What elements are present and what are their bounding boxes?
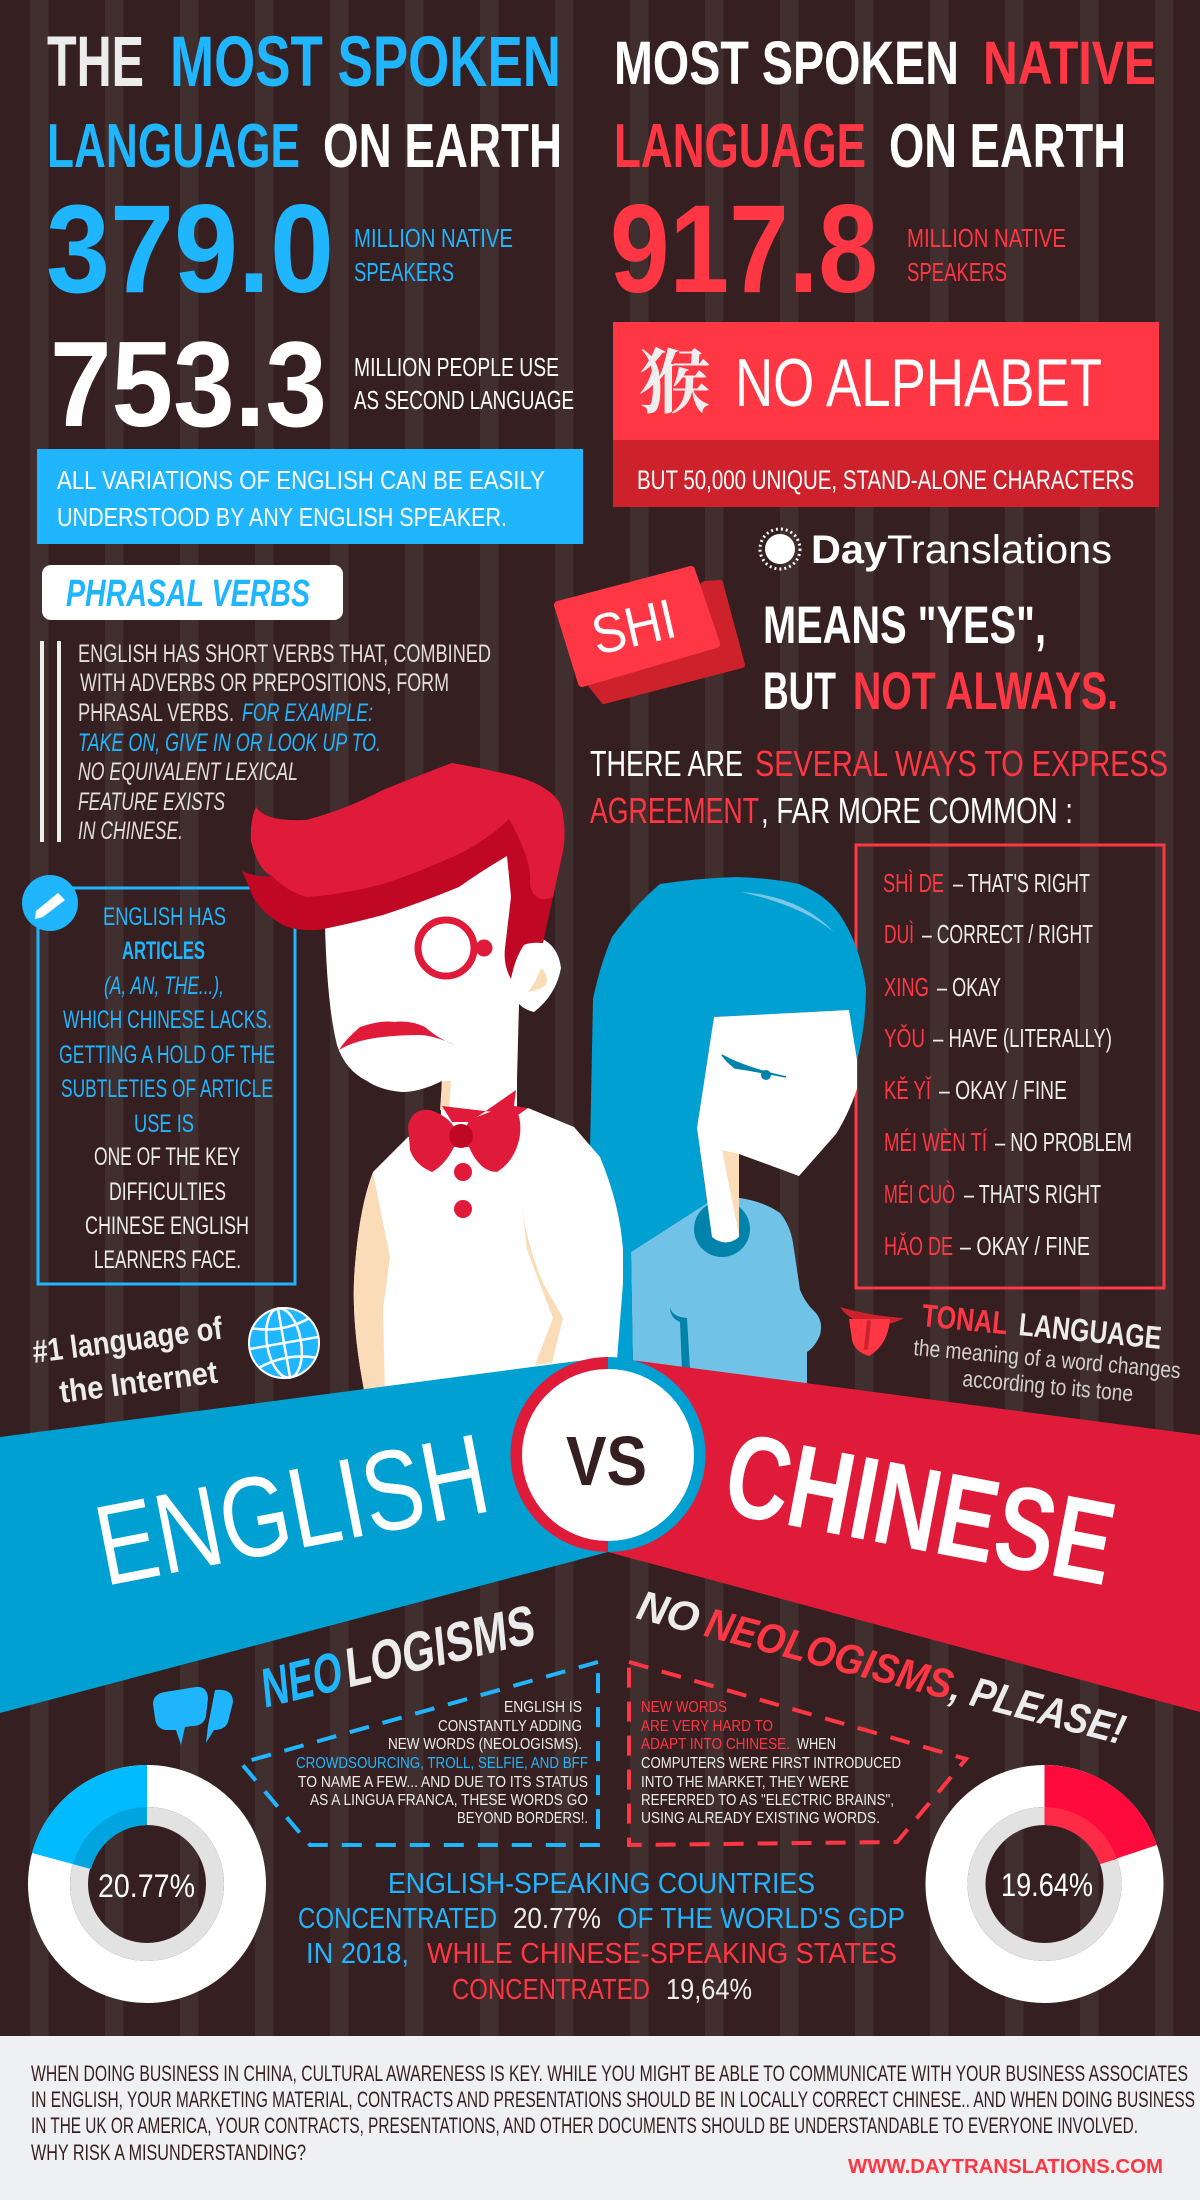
logo: Day Translations: Translations xyxy=(887,528,1112,572)
text block: phrasal verbs explanation: NO EQUIVALENT LEXICAL xyxy=(78,758,298,786)
callout: number one language of the internet: #1 language of xyxy=(30,1310,225,1370)
panel: ways to say yes: – NO PROBLEM xyxy=(995,1127,1132,1157)
panel: ways to say yes: MÉI CUÒ xyxy=(884,1179,955,1209)
chart: English GDP donut: 20.77% xyxy=(98,1868,195,1904)
badge: VS xyxy=(510,1357,706,1552)
heading: no neologisms, please xyxy=(633,1581,1130,1753)
panel: ways to say yes: – THAT'S RIGHT xyxy=(953,868,1090,898)
text block: phrasal verbs explanation: FEATURE EXISTS xyxy=(78,788,225,816)
text block: GDP comparison: WHILE CHINESE-SPEAKING STATES xyxy=(427,1938,897,1970)
panel: ways to say yes: – HAVE (LITERALLY) xyxy=(933,1023,1112,1053)
label: shi tag xyxy=(558,570,742,701)
heading: most spoken native language: LANGUAGE xyxy=(614,112,866,181)
illustration: man xyxy=(242,763,623,1395)
panel: articles: WHICH CHINESE LACKS. xyxy=(63,1006,272,1034)
badge: VS: VS xyxy=(566,1422,647,1500)
stat: 917.8 million native speakers: MILLION NATIVE xyxy=(907,223,1066,253)
panel: no neologisms explanation: USING ALREADY EXISTING WORDS. xyxy=(641,1810,880,1827)
stat: 753.3 million second language users: MILLION PEOPLE USE xyxy=(354,352,559,382)
panel: neologisms explanation: AS A LINGUA FRANCA, THESE WORDS GO xyxy=(310,1792,588,1809)
panel: ways to say yes: – CORRECT / RIGHT xyxy=(922,919,1093,949)
panel: articles xyxy=(22,875,295,1284)
stat: 917.8 million native speakers xyxy=(610,180,1066,319)
panel: no neologisms explanation: COMPUTERS WERE FIRST INTRODUCED xyxy=(641,1755,901,1772)
panel: no alphabet: NO ALPHABET xyxy=(735,345,1102,421)
text block: GDP comparison: CONCENTRATED xyxy=(298,1903,497,1935)
panel: neologisms explanation: BEYOND BORDERS!. xyxy=(457,1810,588,1827)
panel: no neologisms explanation: ADAPT INTO CHINESE. xyxy=(641,1736,790,1753)
icon: speech bubbles xyxy=(153,1687,233,1745)
panel: articles: DIFFICULTIES xyxy=(109,1178,226,1206)
stat: 753.3 million second language users: AS SECOND LANGUAGE xyxy=(354,385,574,415)
panel: no neologisms explanation: ARE VERY HARD TO xyxy=(641,1718,773,1735)
callout: variations of English xyxy=(37,449,583,544)
heading: most spoken language: MOST SPOKEN xyxy=(170,23,561,102)
text block: phrasal verbs explanation: TAKE ON, GIVE IN OR LOOK UP TO. xyxy=(78,729,381,757)
panel: ways to say yes: MÉI WÈN TÍ xyxy=(884,1127,988,1157)
chart: Chinese GDP donut xyxy=(946,1765,1157,1982)
heading: means yes, but not always: MEANS "YES", xyxy=(763,596,1046,655)
stat: 379.0 million native speakers: 379.0 xyxy=(46,180,334,319)
panel: ways to say yes: – OKAY / FINE xyxy=(939,1075,1067,1105)
heading: no neologisms, please: NO xyxy=(633,1581,705,1642)
text block: several ways to express agreement: , FAR MORE COMMON : xyxy=(761,790,1073,831)
footer panel xyxy=(0,2036,1200,2200)
text block: tonal language: according to its tone xyxy=(962,1365,1134,1406)
text block: tonal language: LANGUAGE xyxy=(1017,1306,1163,1356)
panel: articles: ENGLISH HAS xyxy=(103,903,226,931)
text block: phrasal verbs explanation: WITH ADVERBS OR PREPOSITIONS, FORM xyxy=(80,669,449,697)
text block: GDP comparison xyxy=(298,1868,905,2006)
text block: phrasal verbs explanation xyxy=(40,640,491,845)
text block: several ways to express agreement: THERE ARE xyxy=(590,743,743,784)
label: phrasal verbs xyxy=(42,565,343,620)
panel: no neologisms explanation: REFERRED TO AS "ELECTRIC BRAINS", xyxy=(641,1792,894,1809)
text block: tonal language: TONAL xyxy=(920,1297,1009,1341)
text block: phrasal verbs explanation: PHRASAL VERBS. xyxy=(78,699,234,727)
heading: most spoken native language: NATIVE xyxy=(983,29,1156,97)
panel: articles: USE IS xyxy=(134,1110,194,1138)
text block: tonal language xyxy=(913,1297,1182,1406)
panel: no neologisms explanation xyxy=(629,1662,966,1845)
panel: articles: GETTING A HOLD OF THE xyxy=(59,1041,275,1069)
text block: GDP comparison: OF THE WORLD'S GDP xyxy=(617,1903,905,1935)
heading: neologisms: LOGISMS xyxy=(343,1592,537,1700)
panel: no neologisms explanation: WHEN xyxy=(797,1736,836,1753)
chart: English GDP donut xyxy=(32,1765,245,1982)
callout: number one language of the internet: the Internet xyxy=(57,1354,220,1410)
panel: ways to say yes: – THAT'S RIGHT xyxy=(964,1179,1101,1209)
text block: GDP comparison: 20.77% xyxy=(513,1903,601,1935)
logo: Day Translations: Day xyxy=(811,528,888,572)
banner: English xyxy=(0,1357,608,1713)
panel: articles: ONE OF THE KEY xyxy=(94,1143,240,1171)
label: phrasal verbs: PHRASAL VERBS xyxy=(66,573,310,615)
panel: neologisms explanation: CROWDSOURCING, TROLL, SELFIE, AND BFF xyxy=(296,1755,588,1772)
stat: 753.3 million second language users: 753.3 xyxy=(50,316,327,452)
text block: GDP comparison: IN 2018, xyxy=(306,1938,409,1970)
callout: variations of English: UNDERSTOOD BY ANY ENGLISH SPEAKER. xyxy=(57,502,507,532)
panel: ways to say yes: HǍO DE xyxy=(884,1231,953,1261)
heading: most spoken native language xyxy=(614,29,1156,181)
panel: articles: (A, AN, THE...), xyxy=(104,972,224,1000)
panel: articles: LEARNERS FACE. xyxy=(94,1246,241,1274)
stat: 917.8 million native speakers: 917.8 xyxy=(610,180,878,319)
heading: neologisms xyxy=(259,1592,537,1720)
panel: articles: CHINESE ENGLISH xyxy=(85,1212,249,1240)
callout: variations of English: ALL VARIATIONS OF ENGLISH CAN BE EASILY xyxy=(57,465,545,495)
heading: no neologisms, please: , PLEASE! xyxy=(945,1663,1130,1753)
text block: several ways to express agreement: AGREEMENT xyxy=(590,790,759,831)
text block: GDP comparison: ENGLISH-SPEAKING COUNTRIES xyxy=(388,1868,815,1900)
heading: no neologisms, please: NEOLOGISMS xyxy=(700,1599,958,1708)
panel: articles: ARTICLES xyxy=(122,937,205,965)
illustration: woman xyxy=(590,877,866,1390)
panel: neologisms explanation: TO NAME A FEW... AND DUE TO ITS STATUS xyxy=(298,1774,588,1791)
icon: tongue xyxy=(840,1307,904,1356)
text block: GDP comparison: 19,64% xyxy=(666,1974,752,2006)
banner: Chinese xyxy=(608,1357,1200,1712)
callout: number one language of the internet xyxy=(30,1310,225,1410)
panel: articles: SUBTLETIES OF ARTICLE xyxy=(61,1075,273,1103)
heading: most spoken language xyxy=(47,23,562,181)
icon: globe xyxy=(243,1302,325,1384)
logo: Day Translations xyxy=(760,528,1112,572)
panel: neologisms explanation: NEW WORDS (NEOLOGISMS). xyxy=(388,1736,582,1753)
stat: 917.8 million native speakers: SPEAKERS xyxy=(907,257,1007,287)
heading: most spoken language: THE xyxy=(47,23,144,102)
panel: ways to say yes xyxy=(856,845,1164,1288)
heading: most spoken native language: MOST SPOKEN xyxy=(614,29,959,97)
text block: phrasal verbs explanation: FOR EXAMPLE: xyxy=(242,699,373,727)
panel: ways to say yes: – OKAY / FINE xyxy=(960,1231,1090,1261)
text block: phrasal verbs explanation: ENGLISH HAS SHORT VERBS THAT, COMBINED xyxy=(78,640,491,668)
chart: Chinese GDP donut: 19.64% xyxy=(1001,1867,1093,1903)
heading: means yes, but not always: BUT xyxy=(763,662,836,721)
stat: 379.0 million native speakers xyxy=(46,180,513,319)
text block: phrasal verbs explanation: IN CHINESE. xyxy=(78,817,183,845)
footer panel: WWW.DAYTRANSLATIONS.COM xyxy=(848,2156,1163,2178)
panel: no alphabet xyxy=(613,322,1159,507)
panel: ways to say yes: XING xyxy=(884,972,929,1002)
panel: ways to say yes: DUÌ xyxy=(884,919,914,949)
heading: most spoken language: ON EARTH xyxy=(323,112,562,181)
stat: 379.0 million native speakers: MILLION NATIVE xyxy=(354,223,513,253)
label: shi tag: SHI xyxy=(586,586,682,667)
text block: GDP comparison: CONCENTRATED xyxy=(452,1974,650,2006)
heading: means yes, but not always xyxy=(763,596,1118,721)
stat: 753.3 million second language users xyxy=(50,316,574,452)
panel: neologisms explanation: ENGLISH IS xyxy=(504,1699,582,1716)
footer panel: WHY RISK A MISUNDERSTANDING? xyxy=(31,2140,306,2165)
panel: neologisms explanation: CONSTANTLY ADDING xyxy=(438,1718,582,1735)
panel: ways to say yes: – OKAY xyxy=(937,972,1001,1002)
panel: neologisms explanation xyxy=(241,1662,598,1845)
heading: neologisms: NEO xyxy=(259,1639,345,1720)
panel: ways to say yes: SHÌ DE xyxy=(883,868,944,898)
icon: pencil xyxy=(22,875,78,931)
text block: several ways to express agreement xyxy=(590,743,1168,831)
panel: ways to say yes: YǑU xyxy=(884,1023,925,1053)
panel: no neologisms explanation: INTO THE MARKET, THEY WERE xyxy=(641,1774,849,1791)
panel: ways to say yes: KĚ YǏ xyxy=(884,1075,932,1105)
heading: most spoken language: LANGUAGE xyxy=(47,112,300,181)
panel: no neologisms explanation: NEW WORDS xyxy=(641,1699,727,1716)
banner: English: ENGLISH xyxy=(86,1410,498,1611)
panel: no alphabet: 猴 xyxy=(639,326,710,428)
stat: 379.0 million native speakers: SPEAKERS xyxy=(354,257,454,287)
